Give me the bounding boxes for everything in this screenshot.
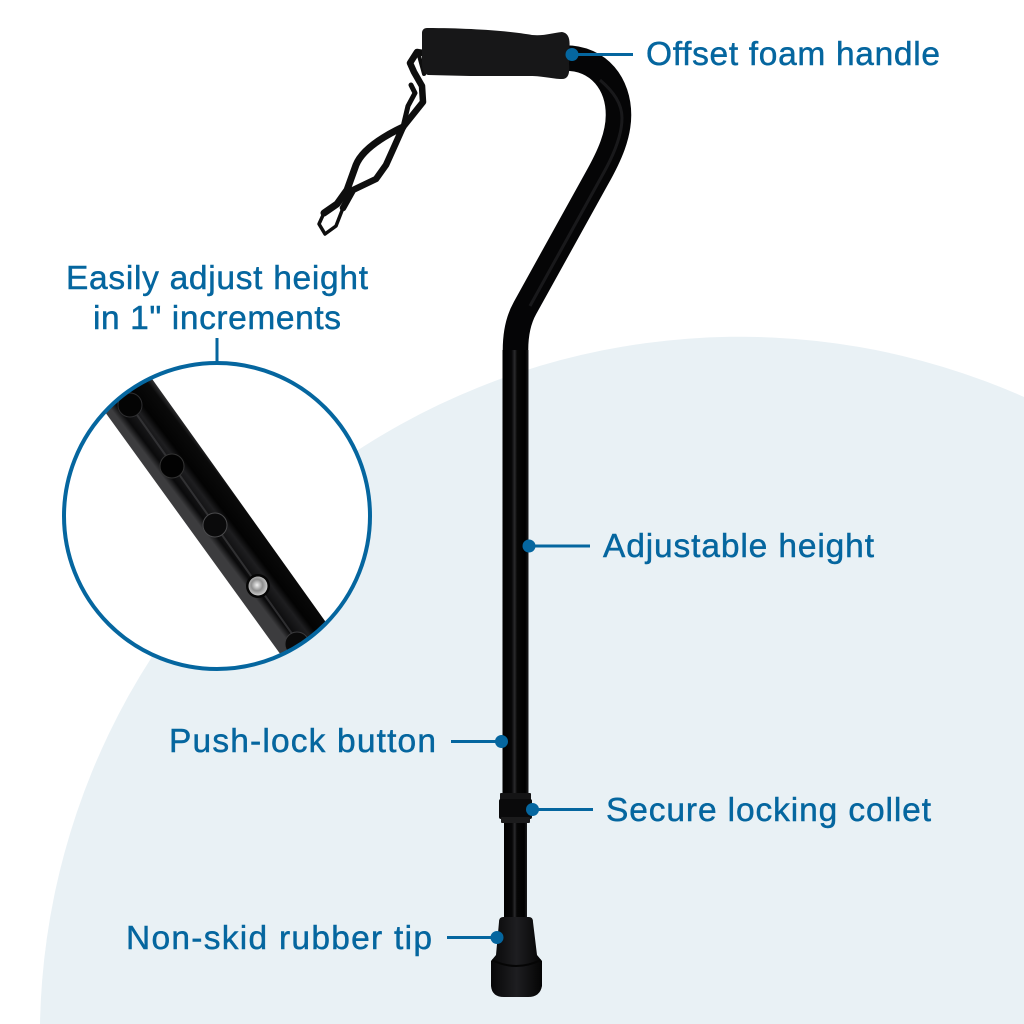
upper shaft (502, 350, 528, 796)
wrist strap (319, 52, 424, 234)
cane (319, 28, 622, 997)
callout: non-skid rubber tip: Non-skid rubber tip (126, 920, 432, 957)
rubber tip (491, 917, 542, 997)
curved shaft (516, 58, 618, 800)
inset ring (64, 363, 370, 669)
adjustment holes (118, 393, 309, 656)
magnified shaft (106, 380, 326, 654)
callout: easily adjust height: in 1" increments (93, 300, 341, 337)
locking collet (499, 793, 532, 823)
push button (246, 574, 270, 598)
callout: adjustable height: Adjustable height (603, 528, 875, 565)
shaft highlight (530, 80, 622, 306)
callout: push-lock button: Push-lock button (169, 723, 436, 760)
background circle (40, 337, 1024, 1024)
foam handle (422, 28, 570, 79)
callout: secure locking collet: Secure locking collet (606, 792, 932, 829)
callout: offset foam handle: Offset foam handle (646, 36, 940, 73)
callout: easily adjust height: Easily adjust height (66, 260, 369, 297)
lower shaft (504, 823, 527, 921)
callout: easily adjust height (66, 260, 369, 362)
inset: magnified shaft holes (64, 348, 370, 691)
